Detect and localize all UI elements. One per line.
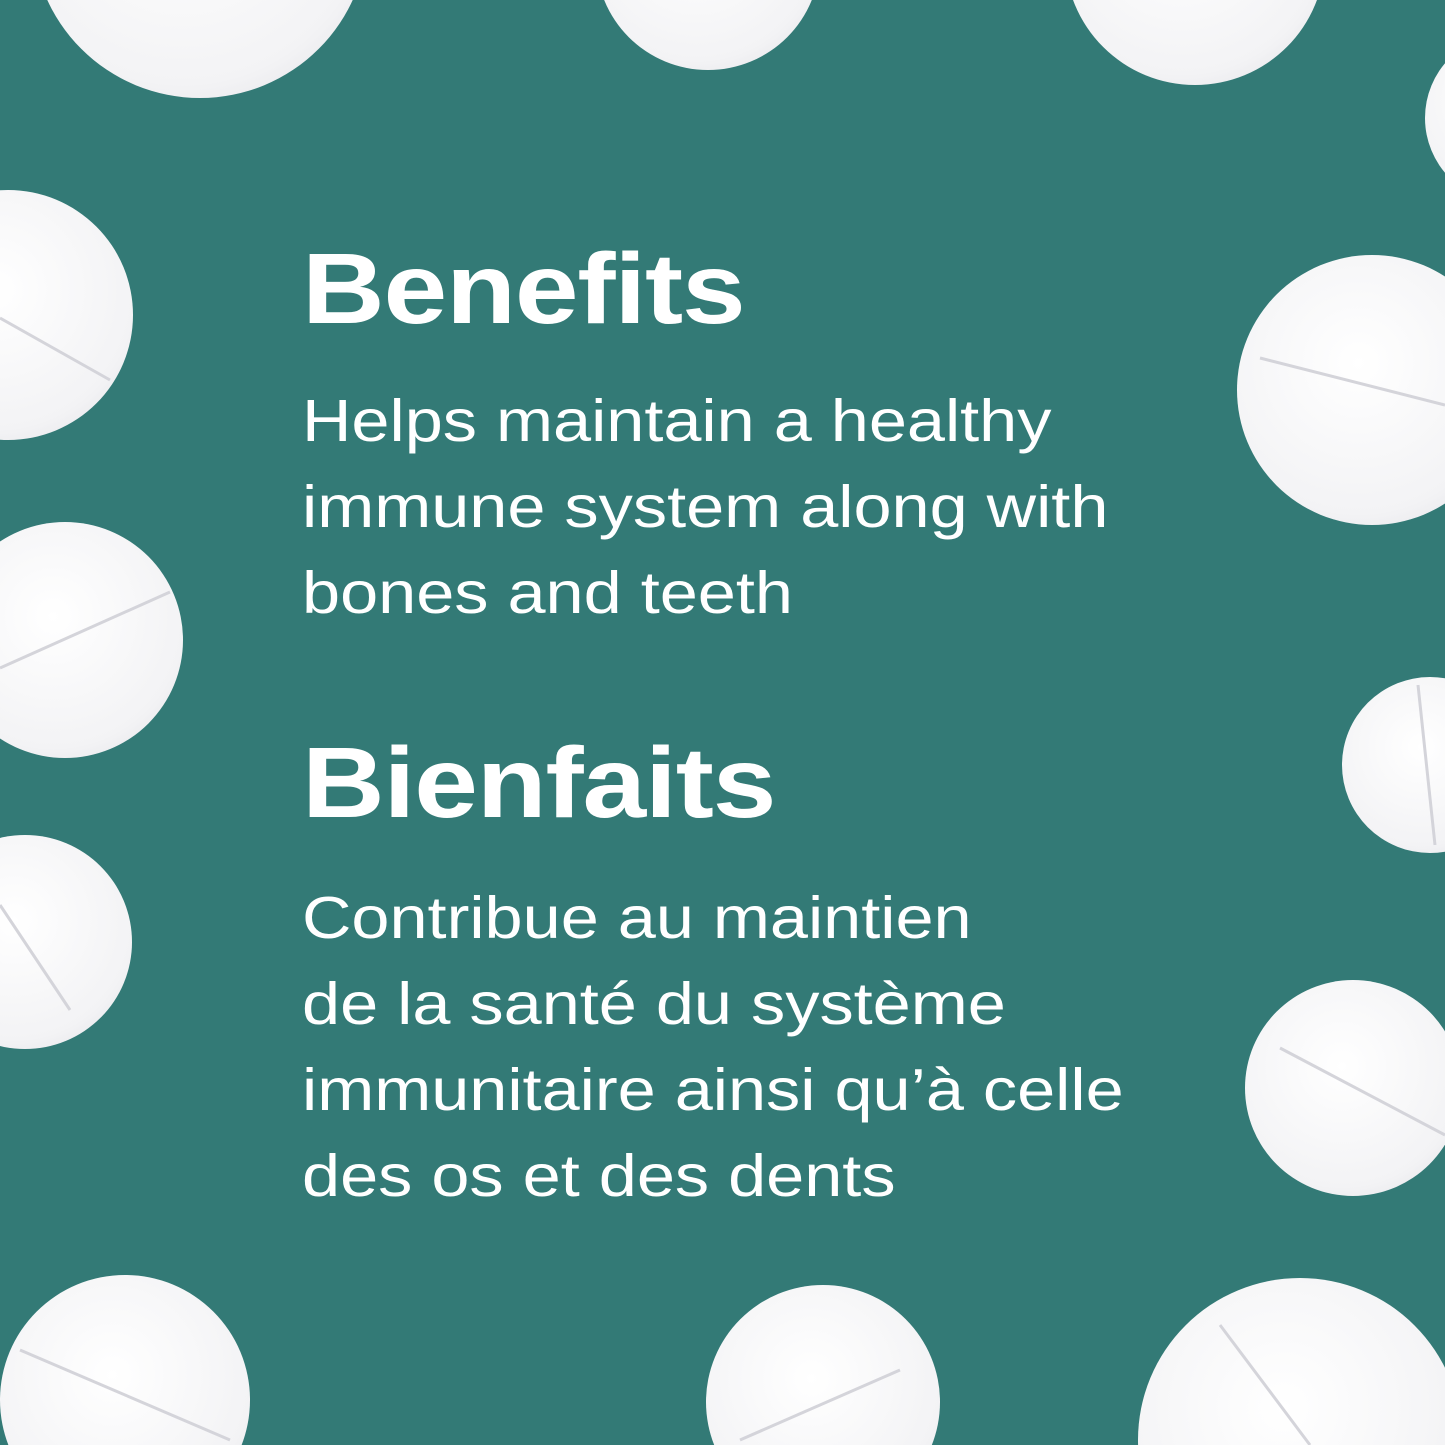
pill: left upper (0, 190, 133, 440)
text: English benefits: immune system along with (302, 474, 1108, 540)
heading: Bienfaits: Bienfaits (302, 727, 775, 839)
text: French benefits: Contribue au maintien (302, 885, 972, 951)
text: French benefits (302, 885, 1124, 1209)
text: French benefits: des os et des dents (302, 1143, 896, 1209)
pill: left middle (0, 522, 183, 758)
text: French benefits: immunitaire ainsi qu’à celle (302, 1057, 1124, 1123)
heading: Benefits: Benefits (302, 233, 745, 345)
pill: right edge top (1425, 33, 1445, 203)
pill: left lower (0, 835, 132, 1049)
pill: top-right (1065, 0, 1325, 85)
pill: bottom-center (706, 1285, 940, 1445)
text: English benefits: bones and teeth (302, 560, 793, 626)
pill: right upper (1237, 255, 1445, 525)
pill: top-left (32, 0, 368, 98)
pill: bottom-left (0, 1275, 250, 1445)
pill: right lower (1245, 980, 1445, 1196)
pill: right middle (1342, 677, 1445, 853)
text: English benefits: Helps maintain a healthy (302, 388, 1051, 454)
pill: top-center (596, 0, 820, 70)
pill: bottom-right (1138, 1278, 1445, 1445)
text: French benefits: de la santé du système (302, 971, 1006, 1037)
text: English benefits (302, 388, 1108, 626)
